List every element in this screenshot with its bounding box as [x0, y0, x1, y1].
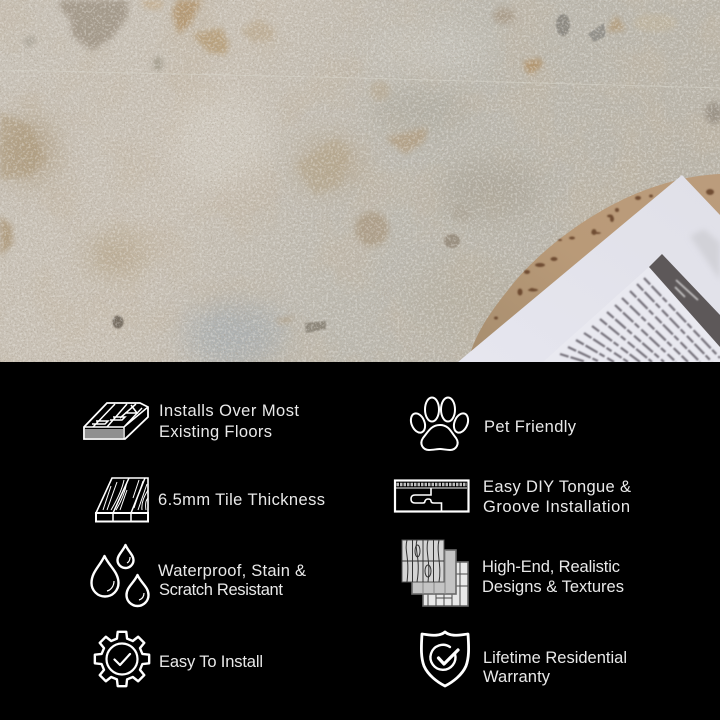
- cork stool: [458, 174, 720, 362]
- text: installs over most existing floors: Existing Floors: [159, 423, 272, 441]
- photo: stone tile floor with cork stool: [0, 0, 720, 369]
- text: easy diy tongue and groove installation: Groove Installation: [483, 498, 630, 516]
- text: waterproof, stain and scratch resistant: Waterproof, Stain &: [158, 562, 306, 580]
- icon: gear with check: [95, 632, 149, 686]
- text: lifetime residential warranty: Lifetime Residential: [483, 649, 627, 667]
- icon: paw print: [408, 398, 471, 450]
- icon: wood plank: [96, 478, 148, 522]
- leaflet header band: [649, 254, 720, 347]
- icon: layered floor: [84, 403, 148, 439]
- text: easy to install: Easy To Install: [159, 653, 263, 671]
- tile seams: [0, 70, 720, 88]
- text: high-end realistic designs and textures: High-End, Realistic: [482, 558, 620, 576]
- text: pet friendly: Pet Friendly: [484, 418, 577, 436]
- icon: water drops: [92, 545, 148, 606]
- icon: stacked texture swatches: [402, 540, 468, 606]
- feature: easy to install: [95, 632, 263, 686]
- text: waterproof, stain and scratch resistant: Scratch Resistant: [159, 581, 283, 599]
- text: lifetime residential warranty: Warranty: [483, 668, 551, 686]
- paper sheet: [458, 175, 720, 362]
- text: high-end realistic designs and textures: Designs & Textures: [482, 578, 624, 596]
- stains: [0, 0, 720, 323]
- text: installs over most existing floors: Installs Over Most: [159, 402, 299, 420]
- icon: tongue and groove joint: [395, 480, 468, 512]
- text: 6.5mm tile thickness: 6.5mm Tile Thickness: [158, 491, 325, 509]
- feature: lifetime residential warranty: [421, 632, 632, 686]
- text: easy diy tongue and groove installation: Easy DIY Tongue &: [483, 478, 631, 496]
- feature: waterproof: [92, 545, 311, 606]
- icon: shield with check: [421, 632, 469, 686]
- feature: pet friendly: [408, 398, 577, 450]
- speckled stone grain: [0, 0, 720, 362]
- feature: tongue and groove: [395, 478, 636, 516]
- leaflet body copy lines: [560, 278, 720, 362]
- feature: realistic designs: [402, 540, 624, 606]
- soft mottling: [0, 0, 720, 362]
- feature: installs over most existing floors: [84, 402, 304, 441]
- printed leaflet: [543, 267, 720, 362]
- panel: features: [0, 362, 720, 720]
- feature: tile thickness: [96, 478, 325, 522]
